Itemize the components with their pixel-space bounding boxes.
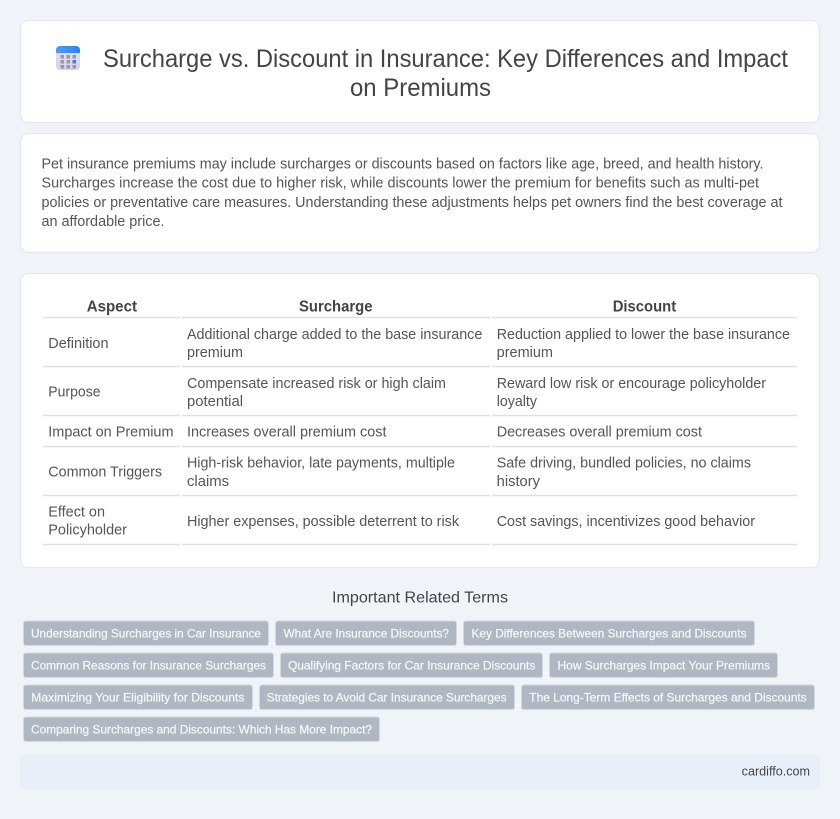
table row: definition: premium (187, 345, 243, 361)
chip (24, 685, 252, 710)
related terms chips (24, 621, 814, 742)
table row: purpose (48, 376, 766, 410)
table row: purpose: loyalty (497, 394, 538, 410)
table row: common triggers: claims (187, 474, 229, 490)
chip (276, 621, 456, 646)
table row: common triggers: history (497, 474, 541, 490)
table row: impact on premium: Increases overall premium cost (187, 425, 386, 441)
table row: common triggers: Common Triggers (48, 465, 162, 481)
table row: effect on policyholder: Policyholder (48, 523, 127, 539)
chip (24, 717, 380, 742)
icon: calendar (56, 46, 80, 70)
chip (464, 621, 754, 646)
text block: introduction: an affordable price. (42, 214, 164, 230)
text block: introduction: Surcharges increase the cost due to higher risk, while discounts lower the premium for benefits such as multi-pet (42, 176, 759, 192)
table row: effect on policyholder: Higher expenses, possible deterrent to risk (187, 514, 460, 530)
panel: introduction (20, 134, 820, 252)
table row: effect on policyholder (48, 505, 755, 539)
table row: purpose: Purpose (48, 385, 100, 401)
title (103, 45, 788, 102)
table header: Surcharge (299, 299, 373, 316)
chip (260, 685, 514, 710)
text block: introduction (42, 156, 782, 230)
chip: What Are Insurance Discounts? (284, 626, 449, 640)
table row: impact on premium: Decreases overall premium cost (497, 425, 702, 441)
table row: definition: Additional charge added to the base insurance (187, 327, 482, 343)
table row: effect on policyholder: Cost savings, incentivizes good behavior (497, 514, 755, 530)
chip: Qualifying Factors for Car Insurance Discounts (288, 658, 535, 672)
table row: purpose: Reward low risk or encourage policyholder (497, 376, 766, 392)
chip: Strategies to Avoid Car Insurance Surcharges (267, 690, 506, 704)
chip: Maximizing Your Eligibility for Discounts (31, 690, 245, 704)
text block: introduction: policies or preventative care measures. Understanding these adjustments helps pet owners find the best coverage at (42, 195, 782, 211)
chip (24, 653, 274, 678)
chip: The Long-Term Effects of Surcharges and Discounts (529, 690, 807, 704)
table row: definition: Reduction applied to lower the base insurance (497, 327, 790, 343)
footer: cardiffo.com (742, 765, 810, 779)
panel: header (20, 20, 820, 122)
heading: important related terms: Important Related Terms (332, 590, 508, 607)
table row: impact on premium: Impact on Premium (48, 425, 174, 441)
chip: How Surcharges Impact Your Premiums (558, 658, 770, 672)
table header: Discount (613, 299, 676, 316)
title: Surcharge vs. Discount in Insurance: Key Differences and Impact (103, 45, 788, 73)
chip: Common Reasons for Insurance Surcharges (31, 658, 266, 672)
chip (550, 653, 778, 678)
table row: common triggers: High-risk behavior, late payments, multiple (187, 456, 455, 472)
chip (24, 621, 268, 646)
table row: purpose: potential (187, 394, 243, 410)
table header (87, 299, 676, 316)
panel: comparison table (20, 274, 820, 568)
table row: common triggers (48, 456, 751, 490)
title: on Premiums (350, 74, 491, 102)
table row: definition: premium (497, 345, 553, 361)
chip (522, 685, 814, 710)
table row: impact on premium (48, 425, 702, 441)
table row: effect on policyholder: Effect on (48, 505, 105, 521)
chip: Comparing Surcharges and Discounts: Which Has More Impact? (31, 722, 372, 736)
table row: purpose: Compensate increased risk or high claim (187, 376, 446, 392)
chip: Key Differences Between Surcharges and Discounts (472, 626, 746, 640)
chip: Understanding Surcharges in Car Insurance (31, 626, 261, 640)
text block: introduction: Pet insurance premiums may include surcharges or discounts based on factors like age, breed, and health history. (42, 156, 764, 172)
table header: Aspect (87, 299, 137, 316)
footer (20, 755, 820, 789)
table row: definition (48, 327, 790, 361)
table row: common triggers: Safe driving, bundled policies, no claims (497, 456, 751, 472)
table row: definition: Definition (48, 336, 108, 352)
chip (280, 653, 542, 678)
